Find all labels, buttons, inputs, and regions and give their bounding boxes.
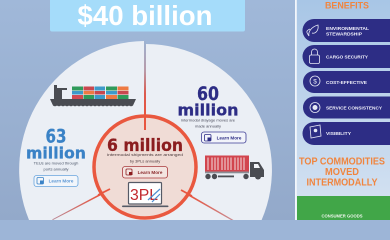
stat: 63 million: TEUs are moved through <box>34 160 78 166</box>
stat: 63 million: 63 <box>46 126 66 148</box>
title banner: $40 billion <box>78 0 212 31</box>
benefit: environmental stewardship <box>302 19 390 42</box>
panel: sidebar <box>295 0 390 220</box>
icon: container ship <box>50 85 136 106</box>
icon: truck <box>205 156 264 180</box>
benefit: environmental stewardship: STEWARDSHIP <box>326 32 362 36</box>
stat: 60 million <box>178 83 246 143</box>
heading: top commodities: MOVED <box>325 167 359 178</box>
button: learn more: Learn More <box>49 178 74 184</box>
benefit: cost-effective: COST-EFFECTIVE <box>326 80 367 85</box>
button: learn more: Learn More <box>217 136 242 140</box>
stat: 63 million <box>26 126 86 186</box>
heading: 6 million: 6 million <box>107 136 183 156</box>
stat: 60 million: million <box>178 100 238 120</box>
benefit: cargo security: CARGO SECURITY <box>326 54 368 60</box>
text: shipments: by 3PLs annually <box>130 158 160 164</box>
stat: 63 million: ports annually <box>44 166 68 172</box>
stat: 60 million: intermodal drayage moves are <box>181 118 236 122</box>
center circle: 6 million <box>94 116 196 218</box>
benefit: cargo security <box>302 45 390 68</box>
connector lines <box>52 41 234 220</box>
panel: consumer goods: CONSUMER GOODS <box>322 214 362 218</box>
panel: consumer goods <box>297 196 390 220</box>
stat: 60 million: 60 <box>197 83 219 105</box>
heading: top commodities: INTERMODALLY <box>306 178 378 188</box>
button: learn more: Learn More <box>138 170 163 175</box>
heading: top commodities <box>299 156 385 188</box>
text: shipments <box>107 152 183 164</box>
benefit: cost-effective <box>303 71 390 93</box>
benefit: environmental stewardship: ENVIRONMENTAL <box>326 26 369 31</box>
benefit: visibility: VISIBILITY <box>326 131 351 136</box>
benefit: service consistency: SERVICE CONSISTENCY <box>326 106 382 110</box>
title banner <box>50 0 245 32</box>
stat: 60 million: made annually <box>195 124 221 128</box>
benefit: cost-effective: $ <box>313 78 317 86</box>
stat: 63 million: million <box>26 144 86 162</box>
large circle <box>19 41 272 220</box>
benefit: visibility <box>302 122 390 145</box>
heading: benefits: BENEFITS <box>325 0 369 12</box>
icon: 3PL laptop: 3PL <box>130 187 158 204</box>
text: shipments: intermodal shipments are arranged <box>107 152 183 157</box>
benefit: service consistency <box>303 96 390 119</box>
